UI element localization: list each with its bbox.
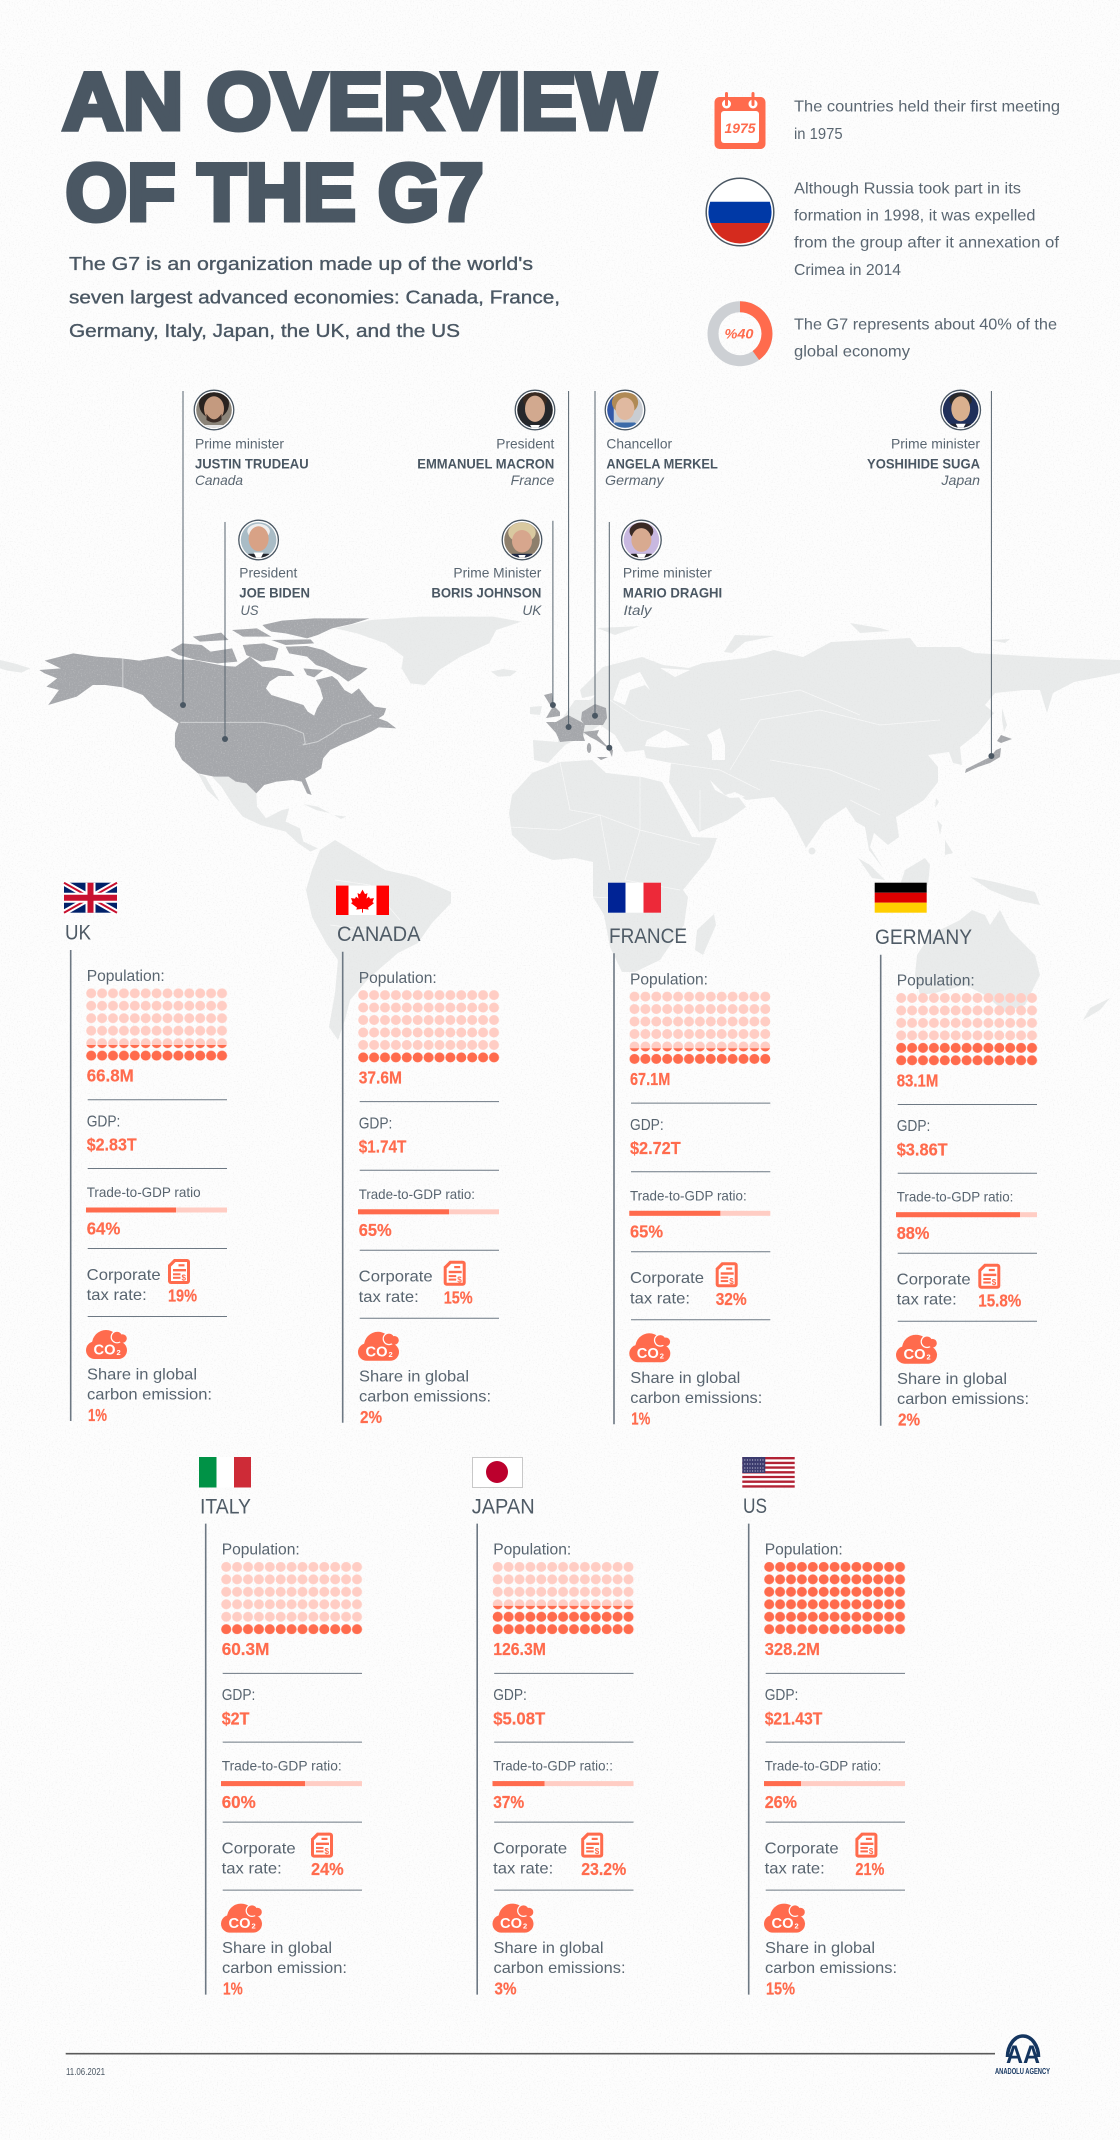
- trade to GDP bar: [221, 1758, 362, 1812]
- panel: Japan: [472, 1458, 634, 1999]
- corporate tax rate: tax rate:: [897, 1292, 957, 1309]
- corporate tax rate: [897, 1264, 1022, 1310]
- trade to GDP bar: 60%: [222, 1792, 256, 1812]
- panel: UK: [64, 883, 228, 1425]
- corporate tax rate: [359, 1261, 473, 1307]
- map: Japan: [965, 735, 1012, 773]
- GDP: [897, 1118, 948, 1159]
- trade to GDP bar: 26%: [765, 1792, 797, 1812]
- leader: Yoshihide Suga: YOSHIHIDE SUGA: [867, 455, 980, 471]
- leader: Justin Trudeau: Prime minister: [195, 435, 284, 451]
- corporate tax rate: $: [457, 1275, 462, 1284]
- corporate tax rate: Corporate: [222, 1840, 296, 1857]
- corporate tax rate: 24%: [311, 1859, 344, 1879]
- intro text: Germany, Italy, Japan, the UK, and the US: [69, 320, 460, 341]
- fact: global economy: global economy: [794, 344, 910, 361]
- population chart: [86, 968, 228, 1086]
- carbon emissions: Share in global: [494, 1940, 604, 1957]
- GDP: $1.74T: [359, 1136, 407, 1156]
- carbon emissions: 1%: [631, 1408, 651, 1428]
- leader: Joe Biden: President: [239, 565, 297, 581]
- fact: global economy: [794, 316, 1057, 361]
- flag: Japan: [472, 1458, 522, 1488]
- corporate tax rate: 15.8%: [978, 1290, 1022, 1310]
- carbon emissions: CO: [94, 1342, 116, 1358]
- heading: US: US: [743, 1495, 767, 1518]
- GDP: [222, 1687, 255, 1728]
- leader: Angela Merkel: [592, 388, 718, 719]
- panel: Germany: [875, 883, 1038, 1430]
- population chart: Population:: [493, 1542, 571, 1559]
- carbon emissions: 2: [794, 1922, 799, 1931]
- leader: Emmanuel Macron: President: [496, 435, 554, 451]
- corporate tax rate: Corporate: [493, 1840, 567, 1857]
- corporate tax rate: Corporate: [897, 1272, 971, 1289]
- carbon emissions: 1%: [88, 1405, 107, 1425]
- carbon emissions: Share in global: [87, 1366, 197, 1384]
- map: Italy: [583, 730, 613, 760]
- corporate tax rate: Corporate: [87, 1267, 161, 1284]
- carbon emissions: CO: [904, 1347, 926, 1363]
- fact: first meeting: The countries held their first meeting: [794, 99, 1060, 116]
- GDP: GDP:: [765, 1687, 798, 1704]
- carbon emissions: Share in global: [359, 1368, 469, 1385]
- carbon emissions: [896, 1335, 1029, 1430]
- GDP: [630, 1117, 681, 1158]
- carbon emissions: 15%: [766, 1979, 795, 1999]
- icon: 40 percent donut: %40: [724, 326, 754, 342]
- corporate tax rate: [222, 1833, 344, 1879]
- heading: France: FRANCE: [609, 925, 687, 948]
- panel: US: [742, 1457, 906, 1999]
- leader: Angela Merkel: Chancellor: [606, 435, 672, 451]
- leader: Justin Trudeau: JUSTIN TRUDEAU: [195, 455, 309, 471]
- carbon emissions: CO: [500, 1916, 522, 1932]
- title: [62, 57, 656, 238]
- footer date: 11.06.2021: [66, 2066, 105, 2078]
- carbon emissions: [358, 1332, 491, 1427]
- carbon emissions: 2: [252, 1922, 256, 1931]
- trade to GDP bar: [629, 1187, 770, 1242]
- map: Canada and US: [39, 618, 396, 795]
- leader: Angela Merkel: Germany: [605, 472, 665, 488]
- leader: Yoshihide Suga: Prime minister: [891, 435, 980, 451]
- map: inland seas: [613, 668, 745, 798]
- world map: [0, 617, 1120, 1040]
- leader: Joe Biden: [222, 518, 310, 742]
- population chart: [896, 973, 1038, 1090]
- carbon emissions: [629, 1333, 762, 1428]
- carbon emissions: [86, 1330, 212, 1425]
- heading: Japan: JAPAN: [472, 1496, 535, 1518]
- corporate tax rate: Corporate: [630, 1270, 704, 1287]
- corporate tax rate: [493, 1833, 627, 1879]
- corporate tax rate: $: [992, 1278, 997, 1287]
- leader: Boris Johnson: UK: [522, 602, 542, 618]
- carbon emissions: CO: [228, 1916, 250, 1932]
- population chart: 37.6M: [359, 1067, 402, 1087]
- flag: UK: [64, 883, 117, 913]
- corporate tax rate: $: [729, 1277, 734, 1286]
- corporate tax rate: tax rate:: [765, 1861, 825, 1878]
- carbon emissions: carbon emission:: [222, 1960, 347, 1977]
- population chart: Population:: [359, 970, 437, 987]
- leader: Joe Biden: JOE BIDEN: [239, 585, 310, 601]
- carbon emissions: 2: [116, 1348, 121, 1357]
- carbon emissions: 2%: [360, 1407, 382, 1427]
- carbon emissions: Share in global: [222, 1940, 332, 1957]
- GDP: GDP:: [87, 1114, 120, 1130]
- trade to GDP bar: Trade-to-GDP ratio:: [630, 1187, 747, 1203]
- carbon emissions: carbon emissions:: [765, 1960, 897, 1977]
- leader: Joe Biden: US: [240, 602, 259, 618]
- trade to GDP bar: [764, 1758, 905, 1812]
- title: AN OVERVIEW: [62, 57, 656, 147]
- flag: Italy: [199, 1457, 251, 1488]
- GDP: $3.86T: [897, 1139, 948, 1159]
- corporate tax rate: $: [324, 1847, 330, 1856]
- population chart: Population:: [87, 968, 165, 985]
- carbon emissions: 2: [523, 1922, 527, 1931]
- intro text: seven largest advanced economies: Canada, France,: [69, 286, 560, 307]
- population chart: 67.1M: [630, 1069, 670, 1089]
- GDP: $2.83T: [87, 1135, 137, 1155]
- intro text: The G7 is an organization made up of the world's: [69, 253, 533, 274]
- fact: first meeting: in 1975: [794, 126, 843, 143]
- corporate tax rate: tax rate:: [359, 1289, 419, 1306]
- leader: Mario Draghi: Italy: [624, 602, 653, 618]
- trade to GDP bar: [86, 1184, 227, 1238]
- fact: first meeting: [794, 99, 1060, 143]
- carbon emissions: 1%: [223, 1979, 243, 1999]
- population chart: 328.2M: [765, 1639, 820, 1659]
- trade to GDP bar: [896, 1189, 1037, 1243]
- corporate tax rate: tax rate:: [87, 1287, 147, 1304]
- leader: Mario Draghi: MARIO DRAGHI: [623, 585, 722, 601]
- population chart: Population:: [765, 1542, 843, 1559]
- heading: Germany: GERMANY: [875, 926, 972, 949]
- corporate tax rate: 23.2%: [581, 1859, 627, 1879]
- population chart: 126.3M: [493, 1639, 546, 1659]
- map: Germany: [581, 704, 607, 725]
- corporate tax rate: 32%: [716, 1289, 747, 1309]
- GDP: [87, 1114, 137, 1155]
- map: country borders: [330, 690, 940, 930]
- icon: 40 percent donut: [713, 307, 767, 361]
- leader: Emmanuel Macron: [417, 388, 572, 730]
- GDP: $2.72T: [630, 1138, 681, 1158]
- population chart: [629, 971, 771, 1089]
- panel: Canada: [336, 886, 500, 1427]
- corporate tax rate: [87, 1259, 197, 1306]
- fact: Russia: [794, 180, 1060, 279]
- trade to GDP bar: 65%: [630, 1222, 663, 1242]
- icon: Russian flag circle: [706, 178, 774, 246]
- trade to GDP bar: [492, 1758, 634, 1812]
- trade to GDP bar: 65%: [359, 1220, 392, 1240]
- trade to GDP bar: 37%: [493, 1792, 525, 1812]
- GDP: GDP:: [222, 1687, 255, 1704]
- corporate tax rate: tax rate:: [222, 1861, 282, 1878]
- population chart: Population:: [630, 971, 708, 988]
- carbon emissions: [492, 1904, 626, 1999]
- leader: Emmanuel Macron: France: [511, 472, 555, 488]
- carbon emissions: 2: [926, 1353, 931, 1362]
- carbon emissions: 3%: [494, 1979, 517, 1999]
- population chart: [764, 1542, 906, 1659]
- GDP: [765, 1687, 823, 1728]
- icon: calendar 1975: 1975: [724, 120, 756, 136]
- leader: Yoshihide Suga: [867, 388, 994, 759]
- flag: Germany: [875, 883, 927, 913]
- GDP: $5.08T: [493, 1708, 545, 1728]
- leader: Justin Trudeau: [180, 388, 309, 708]
- logo: Anadolu Agency: AA: [1006, 2041, 1040, 2069]
- heading: Canada: CANADA: [337, 923, 420, 946]
- corporate tax rate: 15%: [444, 1287, 473, 1307]
- carbon emissions: 2: [660, 1351, 664, 1360]
- map: France: [546, 715, 585, 742]
- corporate tax rate: [630, 1262, 747, 1309]
- fact: global economy: The G7 represents about 40% of the: [794, 316, 1057, 333]
- population chart: 60.3M: [222, 1639, 269, 1659]
- trade to GDP bar: Trade-to-GDP ratio::: [493, 1758, 613, 1774]
- corporate tax rate: $: [182, 1274, 186, 1282]
- trade to GDP bar: 64%: [87, 1218, 121, 1238]
- panel: France: [608, 883, 771, 1428]
- carbon emissions: carbon emission:: [87, 1386, 212, 1404]
- trade to GDP bar: Trade-to-GDP ratio:: [765, 1758, 881, 1774]
- fact: Russia: formation in 1998, it was expelled: [794, 208, 1035, 225]
- leader: Emmanuel Macron: EMMANUEL MACRON: [417, 455, 554, 471]
- GDP: GDP:: [897, 1118, 930, 1135]
- carbon emissions: CO: [637, 1346, 659, 1362]
- leader: Boris Johnson: [431, 518, 556, 708]
- title: OF THE G7: [66, 148, 484, 238]
- trade to GDP bar: [358, 1186, 499, 1240]
- carbon emissions: carbon emissions:: [494, 1960, 626, 1977]
- corporate tax rate: 19%: [168, 1286, 197, 1306]
- corporate tax rate: $: [595, 1847, 600, 1856]
- corporate tax rate: Corporate: [765, 1840, 839, 1857]
- leader: Boris Johnson: Prime Minister: [453, 565, 542, 581]
- population chart: Population:: [222, 1542, 300, 1559]
- map: United Kingdom: [544, 693, 560, 718]
- corporate tax rate: Corporate: [359, 1269, 433, 1286]
- carbon emissions: Share in global: [897, 1371, 1007, 1388]
- leader: Mario Draghi: Prime minister: [623, 565, 712, 581]
- map: light land masses: [0, 617, 1120, 1040]
- corporate tax rate: $: [869, 1847, 874, 1856]
- carbon emissions: carbon emissions:: [359, 1388, 491, 1405]
- heading: Italy: ITALY: [200, 1496, 251, 1518]
- GDP: $2T: [222, 1708, 250, 1728]
- leader: Boris Johnson: BORIS JOHNSON: [431, 585, 541, 601]
- population chart: [358, 970, 500, 1087]
- trade to GDP bar: 88%: [897, 1223, 930, 1243]
- carbon emissions: 2%: [898, 1410, 920, 1430]
- intro text: [69, 253, 560, 341]
- leader: Mario Draghi: [606, 518, 722, 751]
- population chart: 83.1M: [897, 1070, 938, 1090]
- trade to GDP bar: Trade-to-GDP ratio:: [359, 1186, 475, 1202]
- flag: US: [742, 1457, 795, 1488]
- fact: Russia: from the group after it annexation of: [794, 235, 1060, 252]
- GDP: GDP:: [630, 1117, 664, 1134]
- trade to GDP bar: Trade-to-GDP ratio:: [222, 1758, 342, 1774]
- carbon emissions: carbon emissions:: [630, 1390, 762, 1407]
- corporate tax rate: 21%: [855, 1859, 885, 1879]
- icon: calendar 1975: [714, 92, 766, 149]
- flag: Canada: [336, 886, 389, 915]
- leader: Angela Merkel: ANGELA MERKEL: [606, 455, 718, 471]
- GDP: [359, 1115, 407, 1156]
- carbon emissions: CO: [772, 1916, 794, 1932]
- carbon emissions: Share in global: [630, 1370, 740, 1387]
- population chart: 66.8M: [87, 1066, 134, 1086]
- logo: Anadolu Agency: ANADOLU AGENCY: [995, 2066, 1050, 2076]
- leader: Yoshihide Suga: Japan: [940, 472, 980, 488]
- carbon emissions: 2: [388, 1350, 393, 1359]
- GDP: $21.43T: [765, 1708, 823, 1728]
- population chart: [221, 1542, 363, 1659]
- carbon emissions: carbon emissions:: [897, 1391, 1029, 1408]
- trade to GDP bar: Trade-to-GDP ratio: [87, 1184, 201, 1200]
- GDP: GDP:: [493, 1687, 527, 1704]
- carbon emissions: Share in global: [765, 1940, 875, 1957]
- fact: Russia: Although Russia took part in its: [794, 180, 1021, 197]
- panel: Italy: [199, 1457, 363, 1999]
- GDP: GDP:: [359, 1115, 392, 1132]
- carbon emissions: [221, 1904, 347, 1999]
- carbon emissions: [764, 1904, 897, 1999]
- corporate tax rate: tax rate:: [493, 1861, 553, 1878]
- fact: Russia: Crimea in 2014: [794, 262, 901, 279]
- heading: UK: UK: [65, 922, 91, 945]
- logo: Anadolu Agency: [995, 2036, 1050, 2076]
- trade to GDP bar: Trade-to-GDP ratio:: [897, 1189, 1013, 1205]
- population chart: [492, 1542, 634, 1659]
- corporate tax rate: tax rate:: [630, 1290, 690, 1307]
- population chart: Population:: [897, 973, 975, 990]
- flag: France: [608, 883, 661, 913]
- corporate tax rate: [765, 1833, 885, 1879]
- carbon emissions: CO: [366, 1344, 388, 1360]
- leader: Justin Trudeau: Canada: [195, 472, 243, 488]
- GDP: [493, 1687, 545, 1728]
